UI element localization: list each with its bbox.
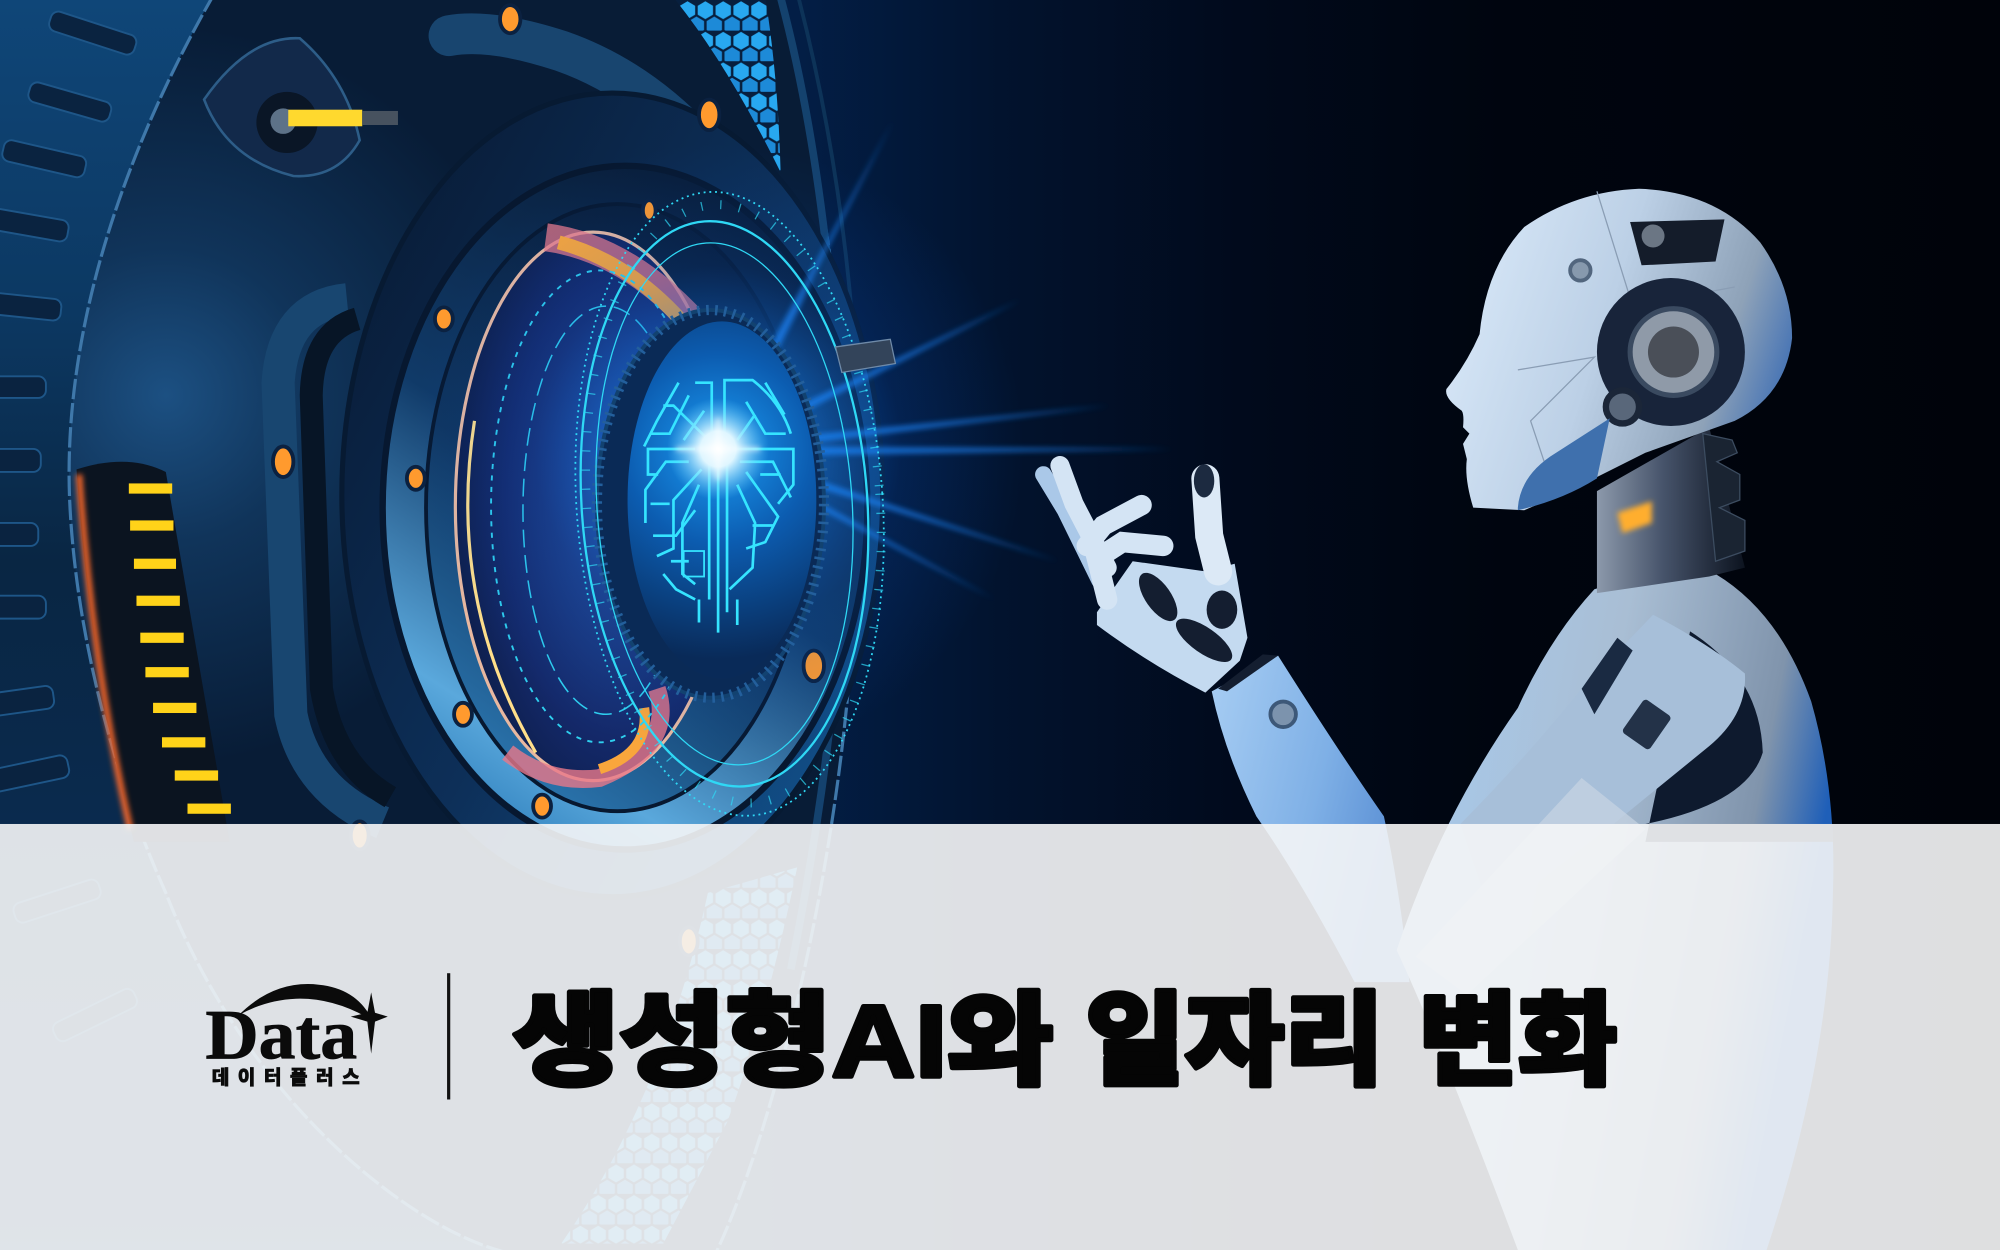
machine: glow field — [383, 77, 1148, 842]
machine: small side pin — [835, 339, 895, 372]
icon: circuit brain — [644, 380, 793, 633]
machine: side handle — [278, 300, 390, 823]
translucent band — [0, 824, 2000, 1250]
machine: central flare — [667, 398, 769, 500]
machine: yellow vent panel — [77, 462, 231, 842]
machine: main dark plate — [69, 0, 856, 1250]
robot: neck — [1597, 427, 1745, 593]
machine: outer thin rims — [781, 0, 860, 969]
temple bolt — [1570, 260, 1591, 281]
ear joint — [1597, 278, 1745, 426]
tire slots — [0, 10, 140, 1044]
machine: orange indicator lights — [273, 5, 824, 955]
title: 일자리 — [1085, 985, 1384, 1099]
logo — [205, 984, 388, 1089]
jaw piece — [1518, 418, 1610, 510]
machine: holographic rings — [555, 181, 904, 826]
title: 생성형AI와 — [513, 985, 1054, 1099]
thumb nail — [1194, 464, 1214, 497]
machine: top arc bracket — [449, 34, 773, 249]
logo star — [351, 992, 388, 1054]
robot: upper arm plate — [1416, 615, 1745, 995]
machine: light rays — [714, 121, 1173, 599]
machine: front knob — [597, 310, 824, 698]
robot: forearm — [1212, 656, 1409, 982]
divider — [447, 973, 450, 1099]
logo korean name: 데이터플러스 — [212, 1067, 360, 1089]
robot: wrist bolt — [1270, 702, 1296, 727]
yellow light stick — [288, 110, 362, 126]
title: 변화 — [1418, 985, 1617, 1099]
seams — [1518, 191, 1735, 478]
palm — [1097, 561, 1247, 693]
machine: outer tire — [0, 0, 536, 1250]
machine: sensor housing — [204, 38, 398, 176]
machine: orange lens ring — [455, 232, 731, 781]
machine: inner ring — [383, 166, 867, 849]
machine: mid ring — [342, 93, 883, 897]
yellow bars — [129, 483, 231, 814]
camera recess — [1630, 219, 1724, 265]
fingers — [1043, 466, 1218, 599]
title — [513, 985, 1617, 1099]
machine: outer hexagon strip — [561, 0, 797, 1244]
robot: head — [1446, 189, 1792, 510]
robot: torso — [1397, 573, 1833, 1250]
logo wordmark: Data — [205, 996, 357, 1075]
robot: hand — [1043, 464, 1278, 693]
robot: shoulder cavity — [1645, 631, 1833, 842]
logo swoosh — [239, 984, 372, 1020]
